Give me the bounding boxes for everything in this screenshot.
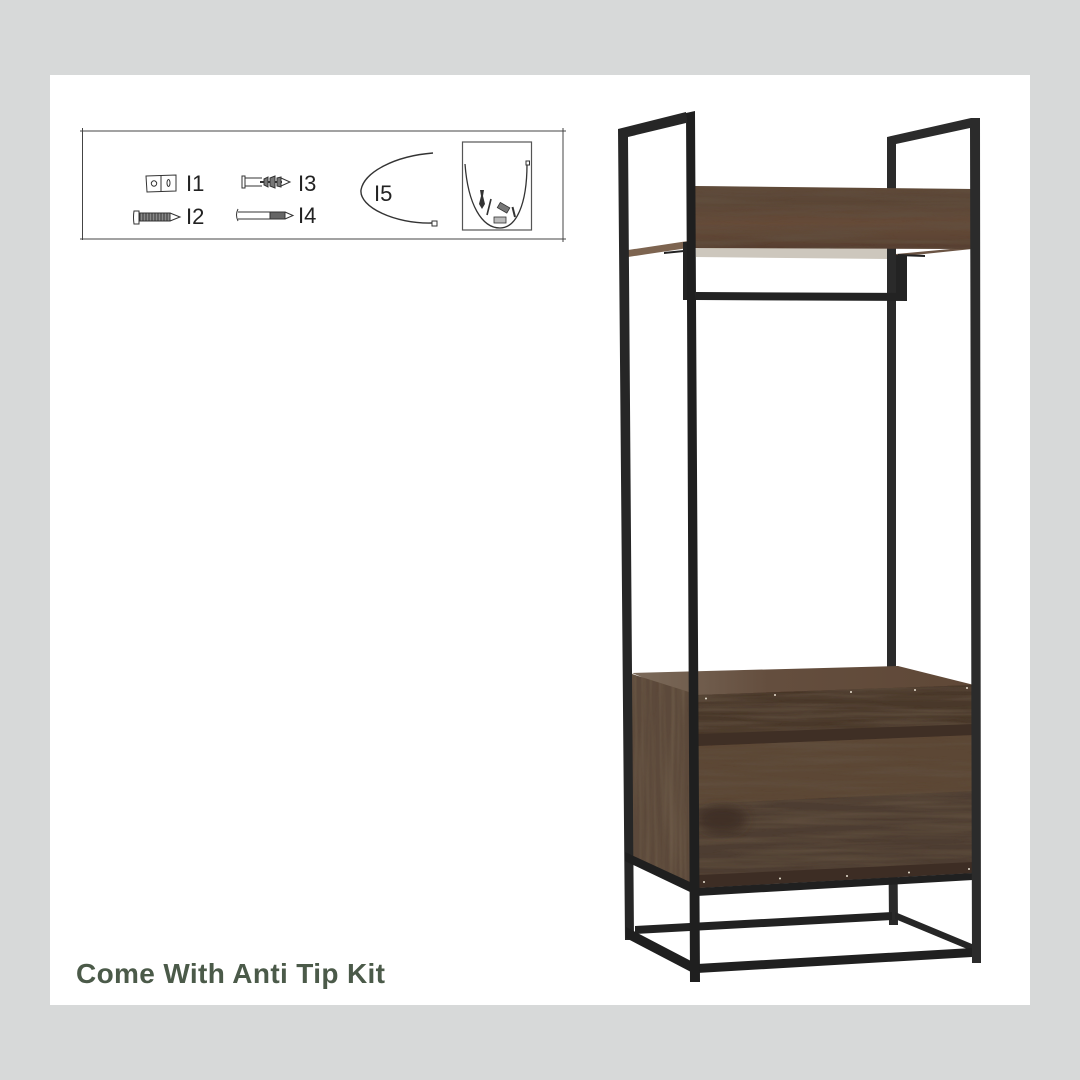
- caption: Come With Anti Tip Kit: [76, 958, 385, 989]
- front left post: [618, 112, 686, 940]
- part I5 strap: I5: [374, 181, 392, 206]
- dark seam band: [698, 724, 974, 747]
- part I2 screw: I2: [186, 204, 204, 229]
- part I4 long screw: [236, 203, 316, 228]
- rear base rail: [635, 912, 892, 934]
- part I1 bracket: I1: [186, 171, 204, 196]
- lower cabinet top: [632, 666, 974, 700]
- lower left rail: [625, 852, 690, 892]
- part I3 wall anchor: [242, 171, 316, 196]
- white panel: [50, 75, 1030, 1005]
- kit bag: [462, 142, 532, 230]
- lower cabinet side: [632, 674, 692, 884]
- hanging rail with brackets: [683, 242, 907, 301]
- product photo: wardrobe rack: [618, 111, 981, 982]
- upper shelf underside: [696, 247, 887, 259]
- parts diagram: anti tip kit: [80, 128, 566, 242]
- lower cabinet back panel: [698, 685, 974, 888]
- bottom strip: [698, 862, 974, 888]
- shelf brackets: [664, 250, 925, 257]
- part I2 screw: [134, 204, 204, 229]
- top board: [698, 685, 974, 742]
- part I4 long screw: I4: [298, 203, 316, 228]
- part I1 bracket: [146, 171, 204, 196]
- front lower rail: [697, 873, 973, 896]
- panel base: [698, 685, 974, 888]
- upper shelf right edge: [896, 247, 972, 257]
- front centre post: [686, 111, 700, 982]
- base left rail: [626, 927, 691, 972]
- front right post and top rail: [887, 118, 981, 963]
- dark knot patch: [698, 806, 746, 834]
- rear right base rail: [895, 912, 972, 951]
- rear right post: [887, 137, 898, 925]
- lower board: [698, 791, 974, 878]
- middle board: [698, 735, 974, 805]
- upper shelf left edge: [628, 241, 688, 257]
- upper shelf back panel: [695, 186, 972, 249]
- base front rail: [697, 948, 972, 973]
- diagram frame: [80, 128, 566, 242]
- part I3 wall anchor: I3: [298, 171, 316, 196]
- infographic canvas: [50, 75, 1030, 1005]
- part I5 strap: [361, 153, 437, 226]
- panel screws: [703, 687, 970, 883]
